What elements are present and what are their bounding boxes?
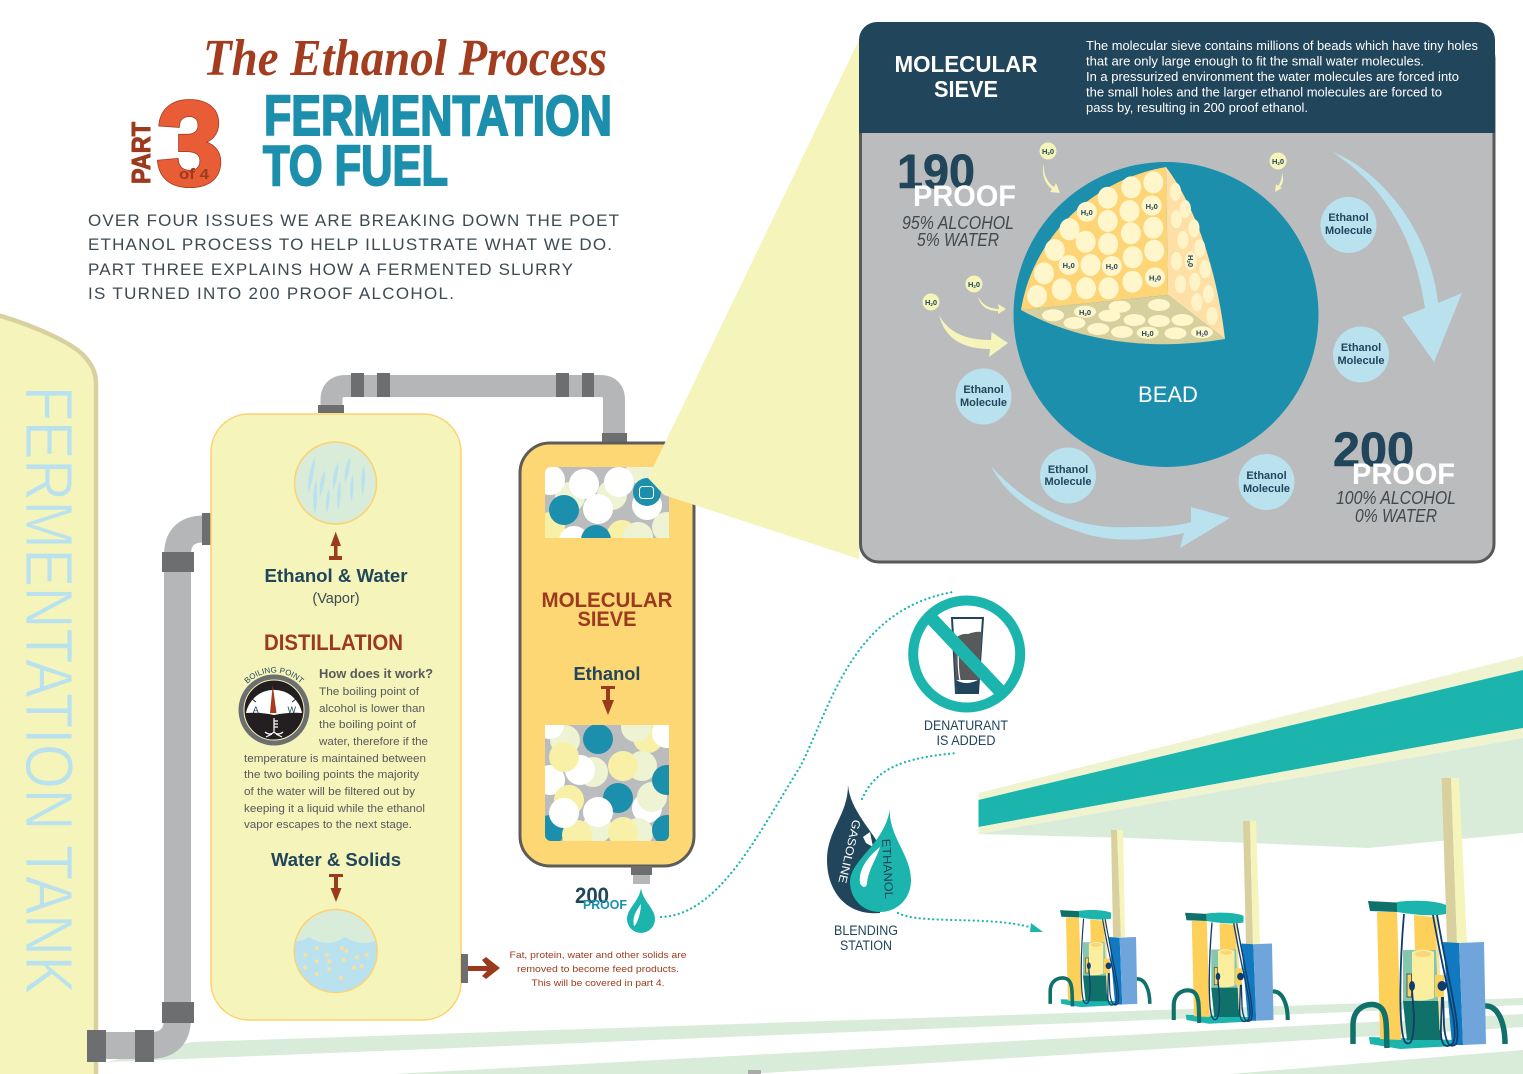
H2O labels in bead: 0 bbox=[1071, 261, 1075, 270]
stat: 200 proof: 0% WATER bbox=[1355, 506, 1437, 526]
stat: 190 proof: 190 bbox=[897, 146, 975, 199]
sieve outlet collar bbox=[631, 866, 652, 884]
stat: 200 proof bbox=[1333, 424, 1456, 526]
200 proof small label bbox=[575, 883, 627, 912]
H2O labels in bead: 2 bbox=[1201, 332, 1204, 338]
label: ethanol and water: Ethanol & Water bbox=[264, 565, 408, 586]
icon: blending drops bbox=[827, 785, 911, 913]
ethanol molecules: Molecule bbox=[1044, 476, 1092, 488]
panel header: In a pressurized environment the water molecules are forced into bbox=[1086, 70, 1459, 84]
ethanol molecules: Molecule bbox=[960, 397, 1007, 409]
icon: no drinking glass bbox=[913, 600, 1020, 708]
canopy poles bbox=[1111, 778, 1467, 945]
intro paragraph bbox=[88, 211, 619, 303]
gas station canopy bbox=[978, 656, 1523, 848]
text: solids note: removed to become feed products. bbox=[517, 964, 679, 975]
wedge bottom face bbox=[1021, 295, 1225, 344]
H2O molecules outside bbox=[922, 142, 1286, 310]
panel header: The molecular sieve contains millions of beads which have tiny holes bbox=[1086, 39, 1478, 53]
arrow: down bbox=[601, 686, 615, 715]
ethanol molecules: Ethanol bbox=[1048, 464, 1088, 476]
ethanol molecules: Molecule bbox=[1243, 483, 1290, 495]
H2O labels in bead: H bbox=[1106, 262, 1111, 271]
H2O labels in bead: 0 bbox=[1149, 329, 1154, 338]
dotted line to pumps bbox=[898, 913, 1043, 932]
H2O labels in bead: 2 bbox=[1084, 312, 1087, 317]
text: how does it work: alcohol is lower than bbox=[319, 703, 425, 715]
H2O molecules outside: H bbox=[1272, 157, 1277, 166]
icon: boiling point gauge: A bbox=[253, 705, 259, 715]
intro paragraph: IS TURNED INTO 200 PROOF ALCOHOL. bbox=[88, 284, 454, 303]
bead bbox=[1014, 162, 1318, 467]
H2O labels in bead: 2 bbox=[1068, 265, 1071, 270]
icon: boiling point gauge: BOILING POINT bbox=[244, 667, 304, 684]
icon: blending drops: GASOLINE bbox=[835, 818, 862, 885]
H2O labels in bead: 2 bbox=[1186, 260, 1191, 263]
H2O labels in bead: 0 bbox=[1114, 262, 1118, 271]
label: blending station: STATION bbox=[840, 938, 892, 953]
panel header: the small holes and the larger ethanol molecules are forced to bbox=[1086, 86, 1442, 100]
ethanol molecules: Molecule bbox=[1337, 355, 1385, 367]
label: denaturant: DENATURANT bbox=[924, 718, 1008, 733]
fuel pump 1 bbox=[1050, 910, 1150, 1007]
arrow: right blue bbox=[1332, 152, 1462, 362]
ethanol molecules: Molecule bbox=[1325, 225, 1372, 237]
heading: fermentation to fuel: TO FUEL bbox=[263, 134, 448, 198]
H2O labels in bead: 2 bbox=[1111, 266, 1114, 271]
H2O labels in bead: H bbox=[1196, 328, 1201, 338]
lower bead window bbox=[545, 725, 669, 841]
part 3 of 4 badge: PART bbox=[126, 122, 156, 184]
text: how does it work bbox=[244, 666, 433, 831]
wedge left face bbox=[1021, 167, 1168, 310]
title: The Ethanol Process bbox=[203, 30, 607, 87]
arrow: pale top left bbox=[1043, 163, 1060, 193]
part 3 of 4 badge: 3 bbox=[157, 78, 223, 210]
ethanol molecules: Ethanol bbox=[1246, 470, 1287, 482]
H2O labels in bead: 0 bbox=[1204, 328, 1208, 338]
H2O labels in bead: H bbox=[1186, 255, 1195, 260]
dotted line to blending bbox=[862, 753, 957, 799]
label: denaturant: IS ADDED bbox=[936, 733, 996, 748]
text: how does it work: temperature is maintained between bbox=[244, 753, 426, 765]
icon: water and solids circle bbox=[294, 908, 378, 994]
H2O molecules outside: H bbox=[1042, 147, 1047, 156]
ethanol molecules bbox=[956, 197, 1389, 510]
text: how does it work: The boiling point of bbox=[319, 686, 420, 698]
stat: 190 proof bbox=[897, 146, 1016, 250]
arrow: pale large bbox=[939, 315, 1008, 357]
upper bead window bbox=[545, 467, 669, 538]
H2O labels in bead: H bbox=[1081, 208, 1086, 217]
panel: distillation bbox=[210, 413, 462, 1021]
H2O molecules outside: 2 bbox=[930, 302, 933, 307]
H2O molecules outside: 0 bbox=[1280, 157, 1284, 166]
H2O molecules outside: 0 bbox=[976, 280, 980, 289]
H2O labels in bead: 2 bbox=[1147, 333, 1150, 338]
arrow: solids out bbox=[461, 954, 500, 983]
heading: molecular sieve: MOLECULAR bbox=[542, 589, 672, 612]
H2O labels in bead: H bbox=[1142, 329, 1147, 338]
arrow: down bbox=[329, 874, 343, 902]
H2O labels in bead bbox=[1063, 202, 1208, 338]
stat: 200 proof: 200 bbox=[1333, 424, 1414, 477]
intro paragraph: OVER FOUR ISSUES WE ARE BREAKING DOWN THE POET bbox=[88, 211, 619, 230]
200 proof small label: PROOF bbox=[583, 897, 627, 912]
H2O labels in bead: H bbox=[1079, 308, 1084, 317]
fuel pump 2 bbox=[1174, 913, 1288, 1024]
pipe: fermentation tank to distillation bbox=[100, 513, 211, 1062]
heading: fermentation to fuel: FERMENTATION bbox=[264, 84, 612, 148]
part 3 of 4 badge: of 4 bbox=[179, 166, 210, 183]
text: solids note: This will be covered in part 4. bbox=[532, 978, 664, 989]
panel header bbox=[859, 22, 1495, 133]
H2O molecules outside: H bbox=[925, 298, 930, 307]
H2O labels in bead: 0 bbox=[1087, 308, 1091, 317]
icon: blending drops: ETHANOL bbox=[879, 838, 896, 899]
ethanol molecules: Ethanol bbox=[1328, 212, 1369, 224]
H2O labels in bead: 0 bbox=[1157, 274, 1161, 282]
text: how does it work: the boiling point of bbox=[319, 719, 417, 731]
H2O molecules outside: 2 bbox=[1047, 151, 1050, 156]
fuel pump 3 bbox=[1353, 901, 1505, 1049]
arrow: up bbox=[329, 532, 342, 560]
stat: 190 proof: 95% ALCOHOL bbox=[902, 213, 1014, 233]
text: how does it work: vapor escapes to the next stage. bbox=[244, 819, 412, 831]
H2O molecules outside: 0 bbox=[1050, 147, 1054, 156]
panel header: pass by, resulting in 200 proof ethanol. bbox=[1086, 101, 1308, 115]
H2O molecules outside: H bbox=[968, 280, 973, 289]
stat: 190 proof: PROOF bbox=[913, 180, 1016, 213]
icon: vapor circle bbox=[294, 442, 376, 524]
H2O molecules outside: 0 bbox=[933, 298, 937, 307]
H2O molecules outside: 2 bbox=[1277, 161, 1280, 166]
H2O labels in bead: 0 bbox=[1089, 208, 1093, 217]
text: solids note: Fat, protein, water and other solids are bbox=[510, 950, 686, 961]
pipe: distillation to molecular sieve bbox=[318, 373, 627, 442]
panel header: MOLECULAR bbox=[894, 51, 1038, 77]
label: bead: BEAD bbox=[1138, 382, 1198, 407]
zoom source bead bbox=[640, 486, 654, 498]
H2O labels in bead: H bbox=[1149, 274, 1154, 282]
label: vapor: (Vapor) bbox=[312, 591, 360, 607]
icon: boiling point gauge bbox=[238, 667, 310, 746]
H2O labels in bead: H bbox=[1146, 202, 1151, 211]
text: solids note bbox=[510, 950, 686, 989]
H2O labels in bead: H bbox=[1063, 261, 1068, 270]
arrow: bottom blue bbox=[991, 466, 1230, 548]
stat: 200 proof: PROOF bbox=[1352, 458, 1455, 491]
arrow: pale small bbox=[978, 296, 1006, 314]
tank outlet collar bbox=[87, 1030, 106, 1062]
label: ethanol: Ethanol bbox=[574, 663, 640, 684]
heading: distillation: DISTILLATION bbox=[264, 630, 403, 655]
panel: molecular sieve detail bbox=[859, 22, 1495, 562]
heading: molecular sieve: SIEVE bbox=[578, 608, 636, 631]
H2O labels in bead: 0 bbox=[1154, 202, 1158, 211]
H2O labels in bead: 0 bbox=[1186, 263, 1195, 267]
text: how does it work: the two boiling points the majority bbox=[244, 769, 419, 781]
H2O molecules outside: 2 bbox=[973, 284, 976, 289]
text: how does it work: How does it work? bbox=[319, 666, 433, 681]
heading: fermentation to fuel bbox=[263, 84, 612, 198]
H2O labels in bead: 2 bbox=[1086, 212, 1089, 217]
stat: 200 proof: 100% ALCOHOL bbox=[1336, 488, 1456, 508]
part 3 of 4 badge bbox=[126, 78, 223, 210]
panel: molecular sieve tank bbox=[520, 443, 694, 866]
ethanol molecules: Ethanol bbox=[963, 384, 1004, 396]
panel header: that are only large enough to fit the small water molecules. bbox=[1086, 54, 1424, 68]
panel header: SIEVE bbox=[934, 76, 998, 102]
dotted line to denaturant bbox=[661, 592, 953, 917]
intro paragraph: PART THREE EXPLAINS HOW A FERMENTED SLURRY bbox=[88, 260, 573, 279]
stat: 190 proof: 5% WATER bbox=[917, 230, 999, 250]
text: how does it work: of the water will be filtered out by bbox=[244, 786, 415, 798]
200 proof small label: 200 bbox=[575, 883, 609, 908]
H2O labels in bead: 2 bbox=[1151, 206, 1154, 211]
text: how does it work: water, therefore if the bbox=[318, 736, 428, 748]
arrow: pale top right bbox=[1275, 172, 1283, 192]
intro paragraph: ETHANOL PROCESS TO HELP ILLUSTRATE WHAT WE DO. bbox=[88, 235, 612, 254]
zoom cone bbox=[648, 40, 859, 559]
H2O labels in bead: 2 bbox=[1154, 278, 1157, 282]
part 3 of 4 badge: 3 bbox=[157, 78, 223, 210]
label: water and solids: Water & Solids bbox=[271, 849, 401, 870]
label: blending station: BLENDING bbox=[834, 923, 898, 938]
text: how does it work: keeping it a liquid while the ethanol bbox=[244, 803, 425, 815]
heading: molecular sieve bbox=[542, 589, 672, 631]
label: blending station bbox=[834, 923, 898, 953]
ground stripes bbox=[107, 998, 1523, 1074]
icon: boiling point gauge: W bbox=[287, 705, 296, 715]
label: denaturant bbox=[924, 718, 1008, 748]
icon: teal drop bbox=[627, 888, 655, 933]
ethanol molecules: Ethanol bbox=[1341, 342, 1381, 354]
wedge right face bbox=[1166, 167, 1225, 339]
